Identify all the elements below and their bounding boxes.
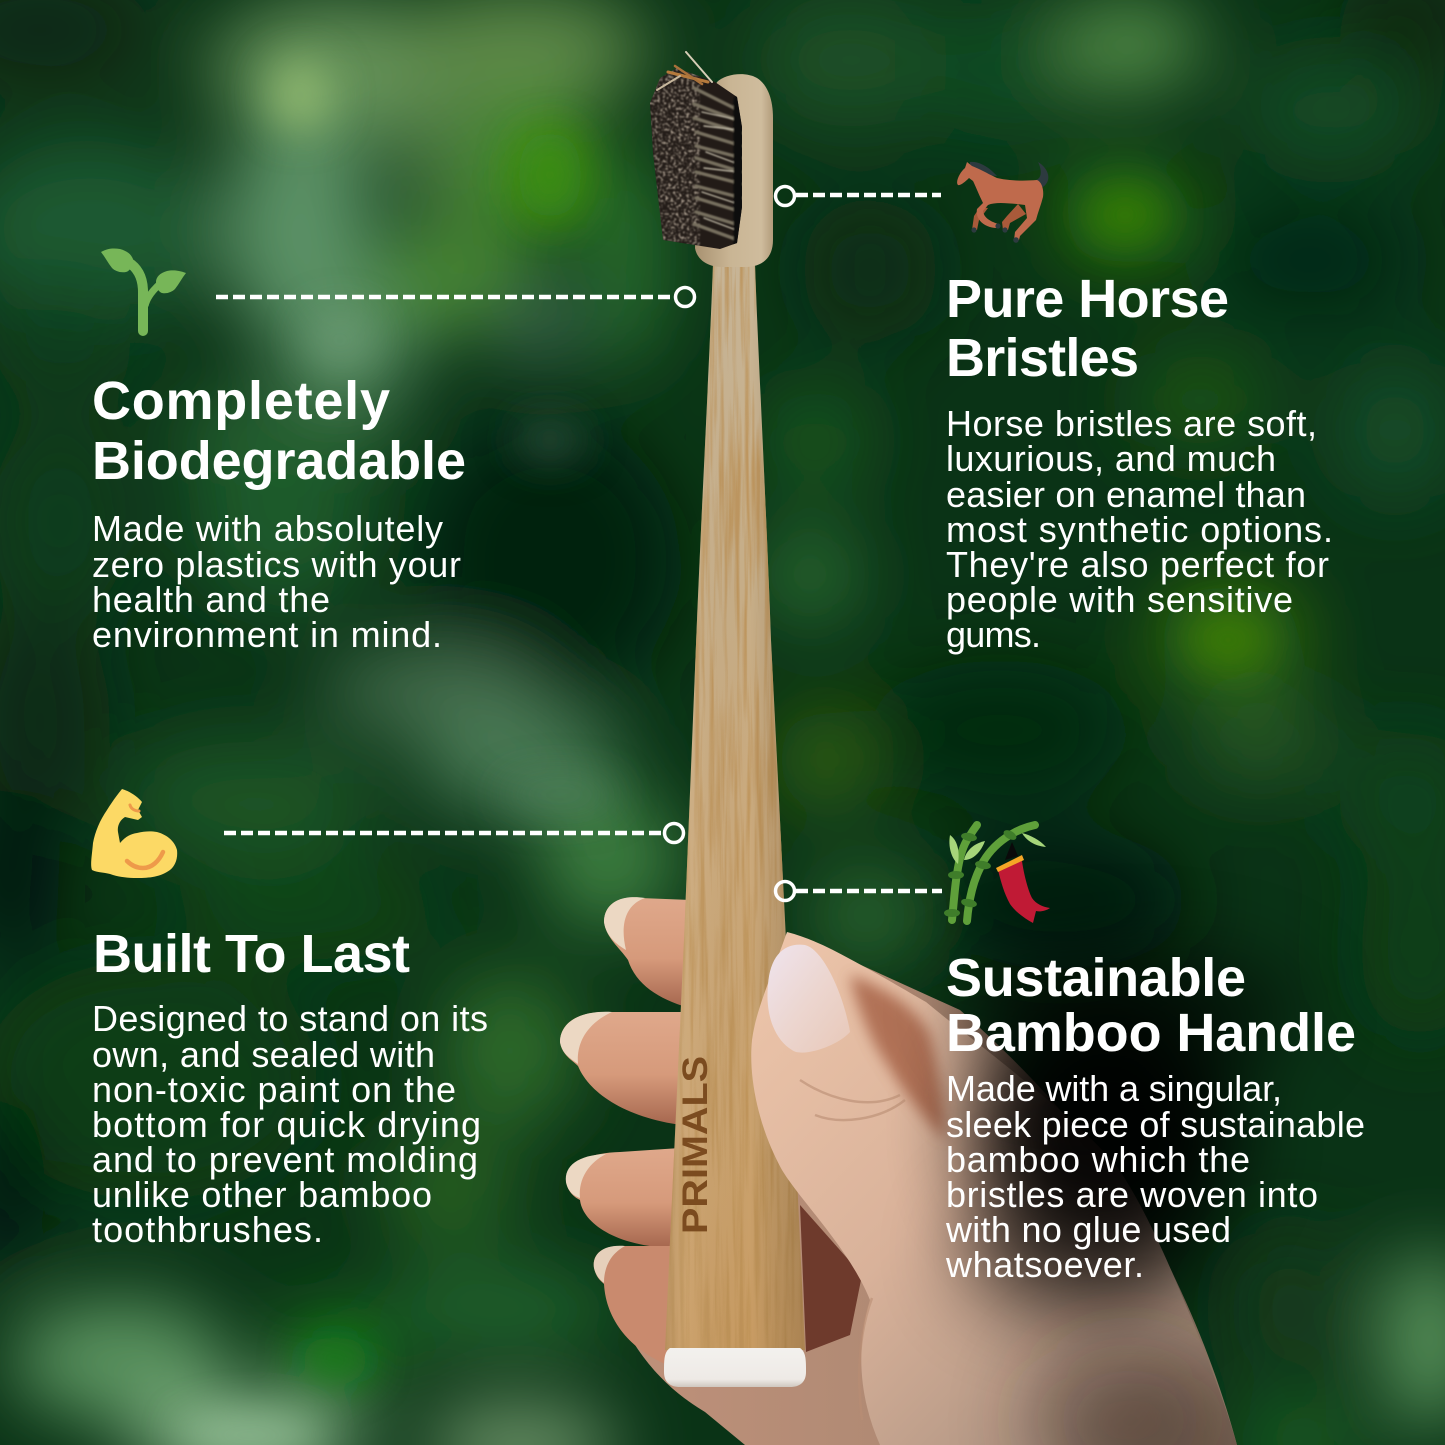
icon: horse [957, 162, 1048, 243]
dark shade behind right text [960, 950, 1300, 1445]
description [92, 998, 488, 1250]
text block: sustainable bamboo handle [945, 948, 1365, 1285]
description: whatsoever. [945, 1244, 1144, 1285]
heading: Completely [92, 371, 390, 431]
finger: pinky [594, 1246, 670, 1366]
description: own, and sealed with [92, 1034, 435, 1075]
description: bottom for quick drying [92, 1104, 481, 1145]
heading: Bamboo Handle [946, 1003, 1356, 1063]
heading [946, 269, 1229, 388]
description: easier on enamel than [946, 474, 1306, 515]
icon: flexed bicep [91, 789, 177, 878]
hand: fingers [560, 897, 690, 1366]
connector: horse bristles [776, 186, 941, 206]
description: people with sensitive [946, 579, 1293, 620]
finger: middle [560, 1012, 690, 1126]
hand: shadow between fingers [800, 1205, 862, 1352]
description: unlike other bamboo [92, 1174, 432, 1215]
connector: bamboo handle [776, 882, 942, 900]
description: Made with a singular, [946, 1068, 1282, 1109]
icon: bamboo and red flag [944, 825, 1050, 923]
text block: built to last [92, 924, 488, 1250]
connector: biodegradable [216, 288, 694, 306]
description: sleek piece of sustainable [946, 1104, 1365, 1145]
text block: pure horse bristles [946, 269, 1333, 655]
heading: Pure Horse [946, 269, 1229, 329]
hand: thumb and back of hand [751, 932, 1237, 1445]
heading: Biodegradable [92, 431, 466, 491]
heading: Sustainable [946, 948, 1246, 1008]
heading: Built To Last [93, 924, 410, 984]
description: Made with absolutely [92, 508, 443, 549]
description [946, 403, 1333, 655]
description: Horse bristles are soft, [946, 403, 1317, 444]
brush head [695, 74, 773, 267]
description: gums. [946, 614, 1041, 655]
description: and to prevent molding [92, 1139, 478, 1180]
description: environment in mind. [92, 614, 442, 655]
description: luxurious, and much [946, 438, 1276, 479]
description: Designed to stand on its [92, 998, 488, 1039]
heading: Bristles [946, 328, 1139, 388]
description: health and the [92, 579, 330, 620]
bristles [650, 68, 742, 249]
white base cap [664, 1348, 806, 1387]
description: bristles are woven into [946, 1174, 1318, 1215]
hand: palm behind handle [600, 960, 1237, 1445]
description [92, 508, 461, 655]
toothbrush [645, 52, 810, 1387]
thumb knuckle creases [800, 1080, 905, 1420]
brush handle [660, 264, 810, 1354]
thumb nail [767, 945, 850, 1053]
description: most synthetic options. [946, 509, 1333, 550]
text block: completely biodegradable [92, 371, 466, 655]
description [945, 1068, 1365, 1285]
heading [946, 948, 1356, 1063]
finger: index [604, 897, 690, 1008]
hand: reddish shade near index base [850, 975, 945, 1140]
connector: built to last [224, 824, 684, 842]
finger: ring [566, 1148, 680, 1248]
description: zero plastics with your [92, 544, 461, 585]
description: with no glue used [945, 1209, 1231, 1250]
icon: sprout [101, 248, 186, 331]
description: non-toxic paint on the [92, 1069, 456, 1110]
stray bristle hairs [657, 52, 712, 90]
description: toothbrushes. [92, 1209, 323, 1250]
brand engraving: PRIMALS [676, 1056, 715, 1234]
heading [92, 371, 466, 491]
description: bamboo which the [946, 1139, 1250, 1180]
description: They're also perfect for [946, 544, 1329, 585]
